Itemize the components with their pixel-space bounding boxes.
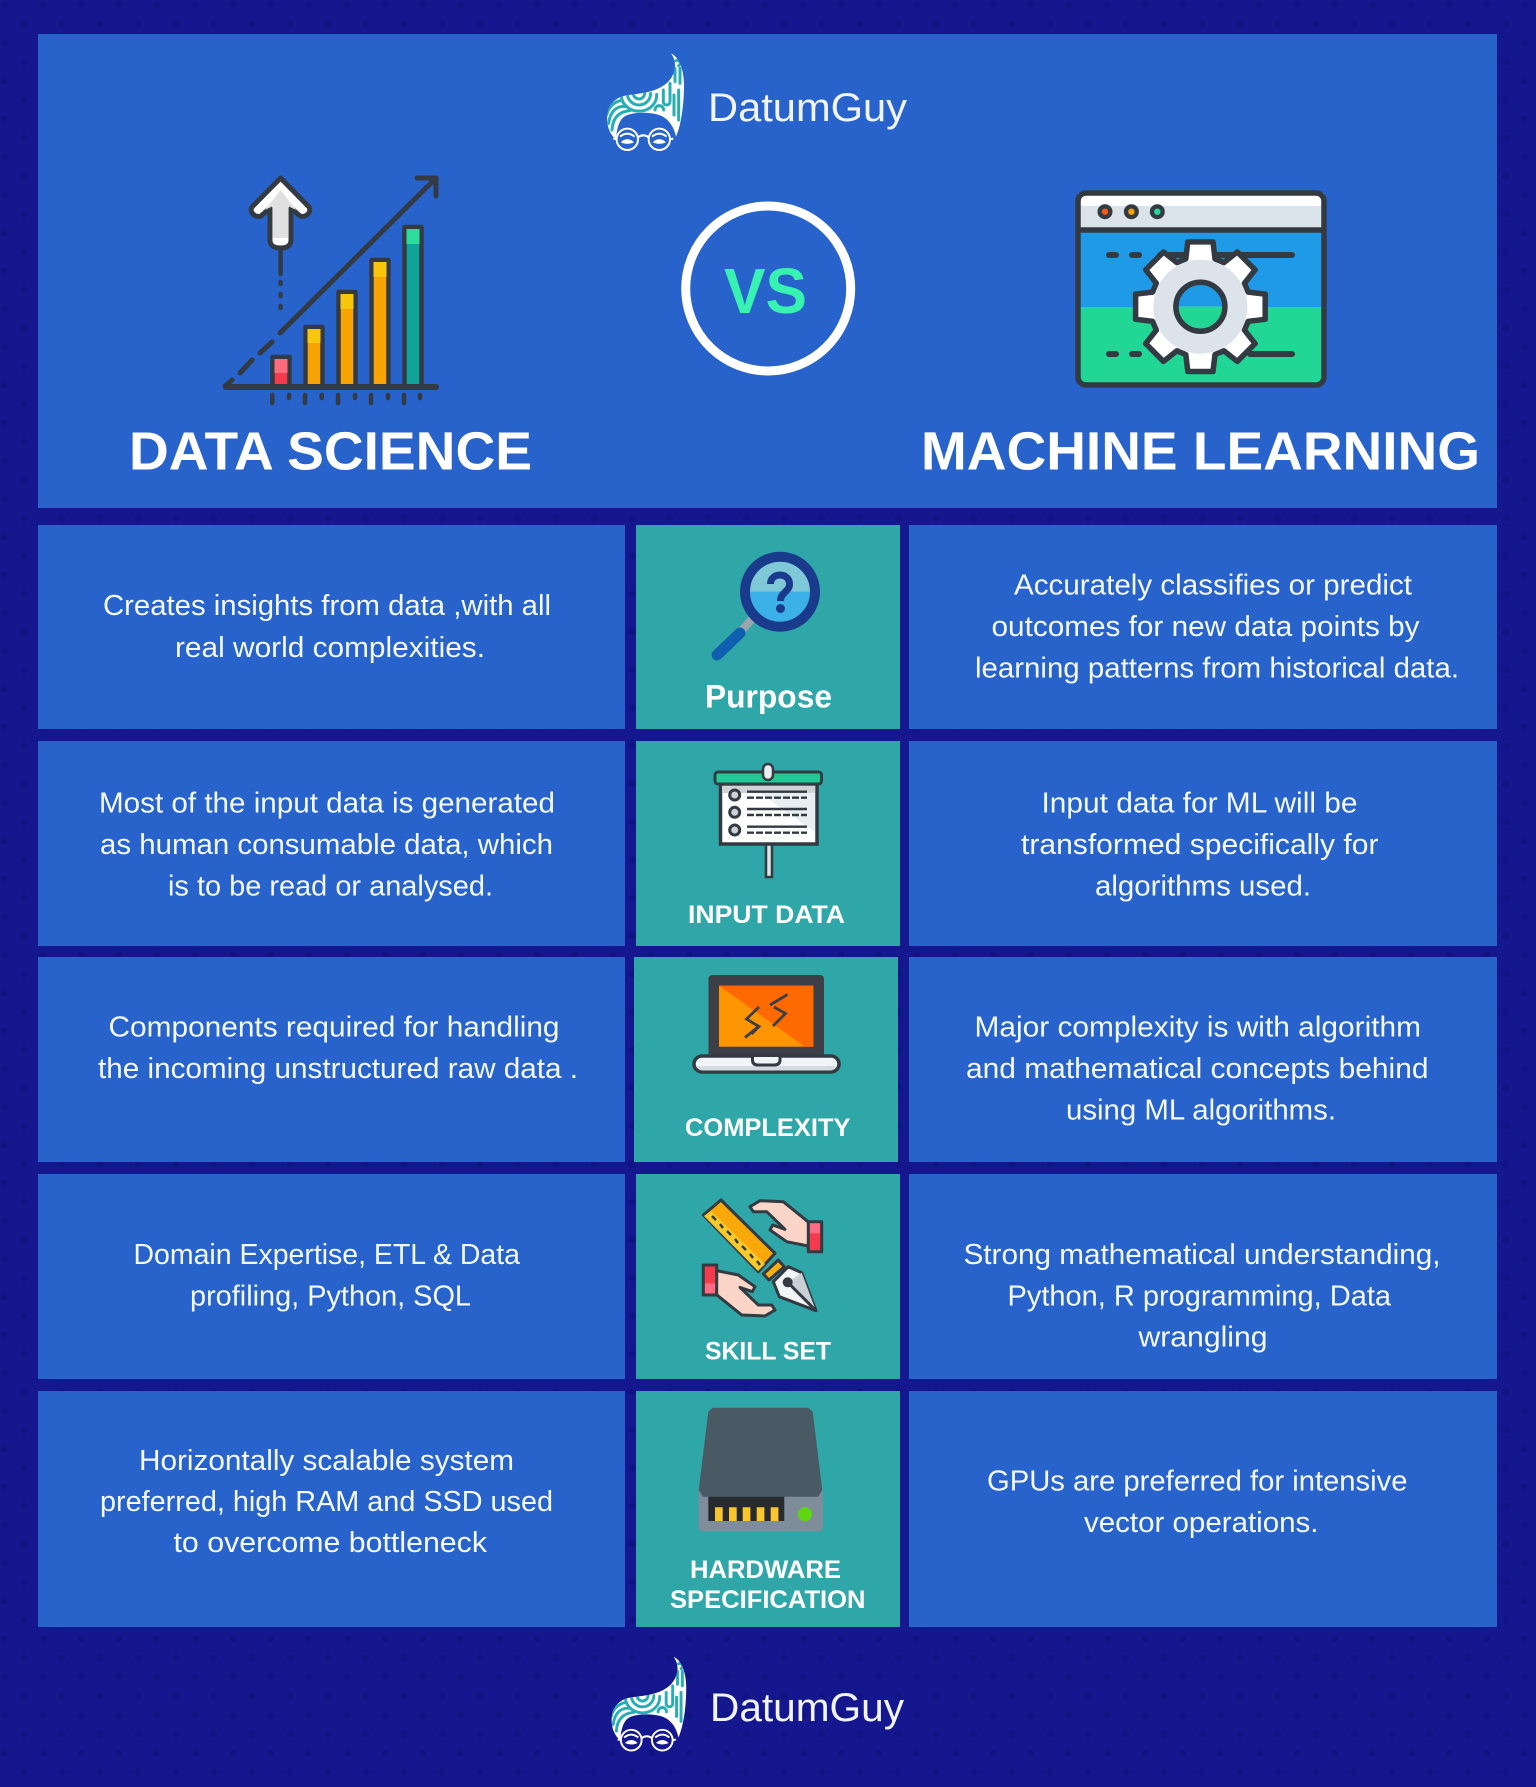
- panel: input data right: algorithms used.: [1095, 870, 1311, 902]
- panel: complexity left: Components required for handling: [108, 1012, 560, 1044]
- panel: skill set right: [909, 1174, 1497, 1379]
- panel: hardware centre: [636, 1391, 900, 1627]
- panel: input data left: is to be read or analysed.: [168, 870, 493, 902]
- panel: skill set right: Strong mathematical understanding,: [964, 1239, 1440, 1271]
- logo: DatumGuy bottom: DatumGuy: [710, 1686, 904, 1730]
- label: Hardware Specification: [670, 1556, 866, 1614]
- logo: DatumGuy top: DatumGuy: [708, 86, 907, 130]
- panel: hardware left: to overcome bottleneck: [174, 1527, 488, 1559]
- panel: purpose right: learning patterns from historical data.: [975, 652, 1459, 684]
- panel: complexity right: using ML algorithms.: [1066, 1094, 1336, 1126]
- icon: window with gear: [1078, 193, 1324, 385]
- panel: complexity right: and mathematical concepts behind: [966, 1053, 1428, 1085]
- panel: input data left: as human consumable data, which: [100, 829, 553, 861]
- panel: purpose centre: [636, 525, 900, 729]
- panel: purpose left: real world complexities.: [175, 632, 485, 664]
- icon: VS circle: VS: [724, 255, 807, 327]
- panel: complexity centre: [634, 957, 898, 1162]
- panel: skill set left: profiling, Python, SQL: [190, 1280, 471, 1312]
- panel: purpose right: [909, 525, 1497, 729]
- panel: header: [38, 34, 1497, 508]
- panel: input data centre: [636, 741, 900, 946]
- panel: hardware left: preferred, high RAM and SSD used: [100, 1486, 553, 1518]
- panel: input data right: [909, 741, 1497, 946]
- logo: DatumGuy top: [607, 53, 907, 150]
- panel: complexity left: the incoming unstructured raw data .: [98, 1053, 578, 1085]
- icon: VS circle: [686, 206, 851, 371]
- panel: skill set left: Domain Expertise, ETL & Data: [134, 1239, 520, 1271]
- label: Purpose: Purpose: [705, 678, 832, 714]
- icon: rising bar chart: [225, 178, 436, 403]
- label: Hardware Specification: SPECIFICATION: [670, 1586, 866, 1614]
- label: Hardware Specification: HARDWARE: [690, 1556, 841, 1584]
- panel: skill set centre: [636, 1174, 900, 1379]
- panel: complexity right: Major complexity is with algorithm: [974, 1012, 1421, 1044]
- heading: Machine Learning: MACHINE LEARNING: [921, 422, 1480, 482]
- panel: skill set right: wrangling: [1137, 1322, 1268, 1354]
- panel: hardware right: vector operations.: [1084, 1507, 1318, 1539]
- panel: input data left: [38, 741, 625, 946]
- heading: Data Science: DATA SCIENCE: [129, 422, 532, 482]
- panel: input data left: Most of the input data is generated: [99, 788, 555, 820]
- panel: skill set right: Python, R programming, Data: [1008, 1280, 1391, 1312]
- panel: complexity right: [909, 957, 1497, 1162]
- panel: skill set left: [38, 1174, 625, 1379]
- panel: input data right: transformed specifically for: [1021, 829, 1379, 861]
- panel: hardware right: [909, 1391, 1497, 1627]
- label: Skill Set: SKILL SET: [705, 1338, 831, 1366]
- icon: hard drive: [699, 1408, 823, 1532]
- panel: complexity left: [38, 957, 625, 1162]
- icon: magnifier with question mark: [717, 557, 815, 655]
- panel: purpose left: [38, 525, 625, 729]
- label: Complexity: COMPLEXITY: [685, 1114, 851, 1142]
- panel: hardware right: GPUs are preferred for intensive: [987, 1466, 1408, 1498]
- logo: DatumGuy bottom: [611, 1657, 904, 1750]
- label: Input Data: INPUT DATA: [688, 901, 845, 929]
- icon: presentation board: [715, 764, 822, 877]
- panel: hardware left: Horizontally scalable system: [139, 1445, 514, 1477]
- panel: input data right: Input data for ML will be: [1042, 788, 1358, 820]
- icon: ruler, pen and hands: [703, 1200, 822, 1316]
- panel: purpose right: Accurately classifies or predict: [1014, 570, 1412, 602]
- panel: purpose left: Creates insights from data ,with all: [103, 590, 551, 622]
- panel: purpose right: outcomes for new data points by: [992, 611, 1420, 643]
- icon: laptop with broken link: [694, 975, 839, 1072]
- panel: hardware left: [38, 1391, 625, 1627]
